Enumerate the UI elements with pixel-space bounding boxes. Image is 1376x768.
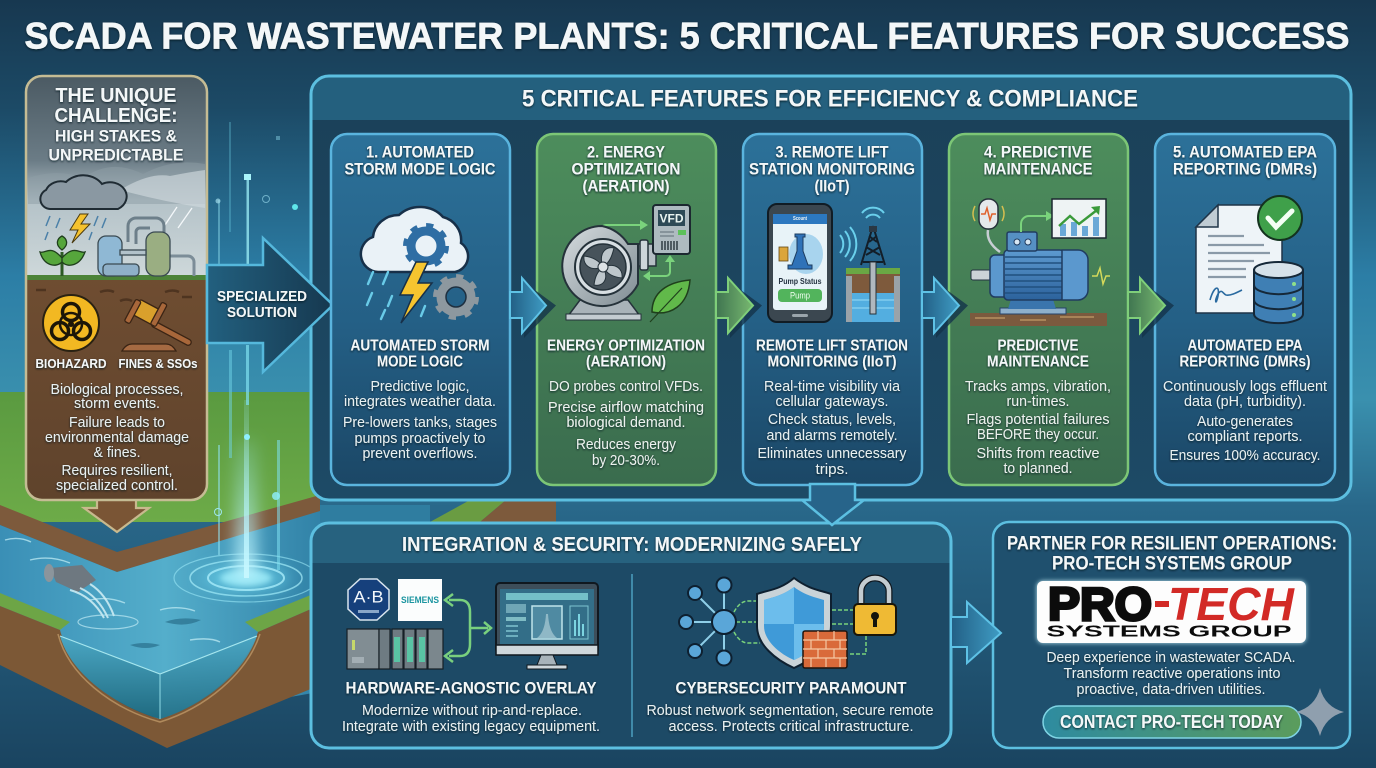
text: challenge description: Requires resilient,: [62, 463, 172, 479]
panel: partner for resilient operations: [993, 522, 1350, 748]
card 4 heading: [984, 142, 1092, 178]
card 5: automated EPA reporting: [1155, 134, 1335, 485]
panel: 5 critical features: [207, 76, 1351, 500]
icon: lift station well: [846, 262, 900, 322]
card 2 subheading: [547, 338, 705, 370]
cybersecurity heading: CYBERSECURITY PARAMOUNT: [676, 678, 907, 698]
card 3 body: [758, 379, 907, 478]
card 2: energy optimization: [537, 134, 716, 485]
heading: partner: [1007, 534, 1337, 574]
button: contact pro-tech today: CONTACT PRO-TECH TODAY: [1060, 712, 1283, 732]
hardware agnostic text: [342, 703, 600, 735]
card 5 body: Ensures 100% accuracy.: [1170, 448, 1320, 464]
heading: the unique challenge: UNPREDICTABLE: [48, 146, 184, 164]
text: challenge description: specialized control.: [56, 478, 178, 494]
text: partner description: proactive, data-driven utilities.: [1076, 682, 1266, 698]
icon: smartphone pump status: Scount: [793, 216, 807, 222]
card 2 body: [548, 379, 704, 469]
card 3: remote lift station monitoring: [743, 134, 922, 485]
icon: biohazard: [43, 295, 99, 351]
logo: Pro-Tech Systems Group: PRO: [1048, 578, 1152, 630]
icon: firewall bricks: [803, 631, 847, 668]
title: SCADA FOR WASTEWATER PLANTS: 5 CRITICAL FEATURES FOR SUCCESS: [24, 16, 1350, 56]
card 3 heading: [749, 142, 915, 196]
panel: integration and security: [311, 523, 951, 748]
icon: network hub: [679, 578, 760, 666]
card 4 body: BEFORE they occur.: [977, 427, 1099, 443]
hardware agnostic text: Integrate with existing legacy equipment.: [342, 719, 600, 735]
card 4 body: run-times.: [1006, 394, 1070, 410]
card 1 body: prevent overflows.: [362, 446, 478, 462]
card 5 body: Auto-generates: [1197, 414, 1293, 430]
text: challenge description: Failure leads to: [69, 415, 165, 431]
card 3 subheading: MONITORING (IIoT): [768, 354, 896, 370]
card 4 body: Flags potential failures: [966, 412, 1110, 428]
icon: report document, check badge and database: [1196, 196, 1303, 323]
heading: 5 critical features: 5 CRITICAL FEATURES FOR EFFICIENCY & COMPLIANCE: [522, 86, 1138, 112]
icon: PLC rack: [347, 629, 443, 669]
icon: aeration blower with VFD and leaf: VFD: [660, 212, 684, 226]
hardware agnostic text: Modernize without rip-and-replace.: [362, 703, 582, 719]
card 2 subheading: ENERGY OPTIMIZATION: [547, 338, 705, 354]
text: challenge description: [45, 382, 189, 494]
card 3 heading: (IIoT): [814, 176, 850, 196]
card 1 body: Predictive logic,: [370, 379, 470, 395]
card 4 body: Tracks amps, vibration,: [965, 379, 1111, 395]
icon: Allen-Bradley logo: A·B: [354, 588, 384, 606]
icon: sparkle: [1296, 688, 1344, 736]
card 5 subheading: AUTOMATED EPA: [1188, 338, 1303, 354]
arrow: specialized solution: [207, 238, 333, 372]
card 1 body: integrates weather data.: [344, 394, 496, 410]
card 1 heading: 1. AUTOMATED: [366, 142, 474, 162]
hardware agnostic heading: HARDWARE-AGNOSTIC OVERLAY: [346, 678, 597, 698]
circuit light lines: [216, 122, 298, 266]
card 2 body: biological demand.: [566, 415, 686, 431]
cybersecurity text: Robust network segmentation, secure remote: [646, 703, 934, 719]
text: challenge description: & fines.: [94, 445, 140, 461]
card 2 heading: 2. ENERGY: [587, 142, 666, 162]
card 3 body: cellular gateways.: [776, 394, 888, 410]
card 1 body: pumps proactively to: [354, 431, 486, 447]
icon: treatment plant tanks: [98, 218, 194, 276]
arrow: integration to partner: [951, 602, 1001, 663]
card 3 body: Eliminates unnecessary: [758, 446, 907, 462]
arrow: card 4 to card 5: [1128, 278, 1174, 338]
arrow: features down to integration: [802, 484, 864, 525]
card 2 heading: OPTIMIZATION: [572, 160, 680, 178]
card 4 heading: 4. PREDICTIVE: [984, 142, 1092, 162]
card 5 heading: REPORTING (DMRs): [1173, 160, 1317, 178]
text: challenge description: environmental damage: [45, 430, 189, 446]
arrow: card 3 to card 4: [922, 278, 968, 338]
label: biohazard and fines: FINES & SSOs: [118, 357, 198, 371]
icon: outfall pipe: [44, 564, 138, 629]
icon: smartphone pump status: Pump Status: [778, 276, 822, 286]
heading: the unique challenge: [48, 85, 184, 164]
arrows: legacy hardware to overlay: [445, 594, 491, 662]
card 5 body: [1163, 379, 1327, 464]
card 2 body: by 20-30%.: [592, 453, 660, 469]
card 2 heading: (AERATION): [582, 176, 670, 196]
label: biohazard and fines: [36, 357, 198, 371]
card 1 subheading: MODE LOGIC: [377, 354, 463, 370]
card 2 body: Reduces energy: [576, 437, 677, 453]
icon: Allen-Bradley logo: [348, 579, 389, 620]
water ripple and light beam: [174, 345, 318, 602]
icon: smartphone pump status: [768, 204, 832, 322]
card 5 body: compliant reports.: [1188, 429, 1302, 445]
arrow: card 2 to card 3: [716, 278, 762, 338]
cybersecurity text: [646, 703, 934, 735]
card 3 body: Real-time visibility via: [764, 379, 901, 395]
card 2 body: DO probes control VFDs.: [549, 379, 703, 395]
panel: the unique challenge: [26, 76, 207, 500]
card 3 heading: STATION MONITORING: [749, 160, 915, 178]
icon: plant: [40, 236, 85, 276]
heading: the unique challenge: CHALLENGE:: [54, 105, 178, 127]
card 4 subheading: MAINTENANCE: [987, 354, 1089, 370]
card 2 heading: [572, 142, 680, 196]
card 3 subheading: REMOTE LIFT STATION: [756, 338, 908, 354]
icon: cloud, gears and lightning: [361, 207, 476, 323]
card 5 subheading: [1180, 338, 1310, 370]
card 1: automated storm mode logic: [331, 134, 510, 485]
heading: partner: PRO-TECH SYSTEMS GROUP: [1052, 554, 1292, 574]
heading: the unique challenge: THE UNIQUE: [56, 85, 176, 107]
arrow: specialized solution: SPECIALIZED: [217, 289, 307, 305]
card 3 subheading: [756, 338, 908, 370]
card 2 body: Precise airflow matching: [548, 400, 704, 416]
card 5 body: data (pH, turbidity).: [1184, 394, 1306, 410]
card 4: predictive maintenance: [949, 134, 1128, 485]
arrow: challenge down to water: [84, 498, 149, 532]
card 5 body: Continuously logs effluent: [1163, 379, 1327, 395]
icon: Siemens logo: SIEMENS: [401, 595, 439, 605]
text: partner description: Transform reactive operations into: [1064, 666, 1280, 682]
card 4 heading: MAINTENANCE: [984, 160, 1092, 178]
card 1 body: Pre-lowers tanks, stages: [343, 415, 497, 431]
card 1 heading: [344, 142, 496, 178]
arrow: specialized solution: SOLUTION: [227, 305, 297, 321]
logo: Pro-Tech Systems Group: TECH: [1168, 578, 1295, 630]
card 3 heading: 3. REMOTE LIFT: [776, 142, 889, 162]
card 5 subheading: REPORTING (DMRs): [1180, 354, 1310, 370]
card 2 subheading: (AERATION): [586, 354, 666, 370]
heading: the unique challenge: HIGH STAKES &: [55, 126, 177, 146]
card 4 body: Shifts from reactive: [976, 446, 1100, 462]
text: challenge description: storm events.: [74, 396, 160, 412]
icon: SCADA monitor: [496, 583, 598, 669]
card 3 body: Check status, levels,: [768, 412, 896, 428]
card 4 body: [965, 379, 1111, 477]
icon: shield: [757, 578, 831, 668]
icon: aeration blower with VFD and leaf: [562, 205, 690, 322]
icon: wifi and cell tower: [840, 208, 885, 265]
text: challenge description: Biological processes,: [50, 382, 184, 398]
icon: storm cloud: [40, 175, 127, 243]
card 4 subheading: PREDICTIVE: [998, 338, 1079, 354]
icon: smartphone pump status: Pump: [790, 290, 810, 300]
arrow: card 1 to card 2: [510, 278, 556, 338]
label: biohazard and fines: BIOHAZARD: [36, 357, 106, 371]
card 4 subheading: [987, 338, 1089, 370]
card 1 subheading: [350, 338, 490, 370]
card 1 subheading: AUTOMATED STORM: [350, 338, 490, 354]
card 3 body: trips.: [816, 462, 848, 478]
button: contact pro-tech today: [1043, 706, 1301, 738]
heading: integration and security: INTEGRATION & SECURITY: MODERNIZING SAFELY: [402, 534, 863, 556]
logo: Pro-Tech Systems Group: [1037, 578, 1306, 643]
card 5 heading: [1173, 142, 1317, 178]
icon: padlock: [832, 578, 896, 654]
logo: Pro-Tech Systems Group: SYSTEMS GROUP: [1046, 624, 1292, 640]
card 3 body: and alarms remotely.: [766, 428, 898, 444]
icon: motor with sensor and trend chart: [970, 199, 1110, 326]
card 1 heading: STORM MODE LOGIC: [344, 160, 496, 178]
icon: gavel: [122, 299, 192, 351]
landscape with water channel: [0, 392, 556, 748]
card 4 body: to planned.: [1004, 461, 1072, 477]
card 5 heading: 5. AUTOMATED EPA: [1173, 142, 1317, 162]
cybersecurity text: access. Protects critical infrastructure.: [668, 719, 914, 735]
icon: Siemens logo: [398, 579, 442, 621]
card 1 body: [343, 379, 497, 462]
text: partner description: Deep experience in wastewater SCADA.: [1046, 650, 1296, 666]
heading: partner: PARTNER FOR RESILIENT OPERATIONS:: [1007, 534, 1337, 554]
text: partner description: [1046, 650, 1296, 698]
